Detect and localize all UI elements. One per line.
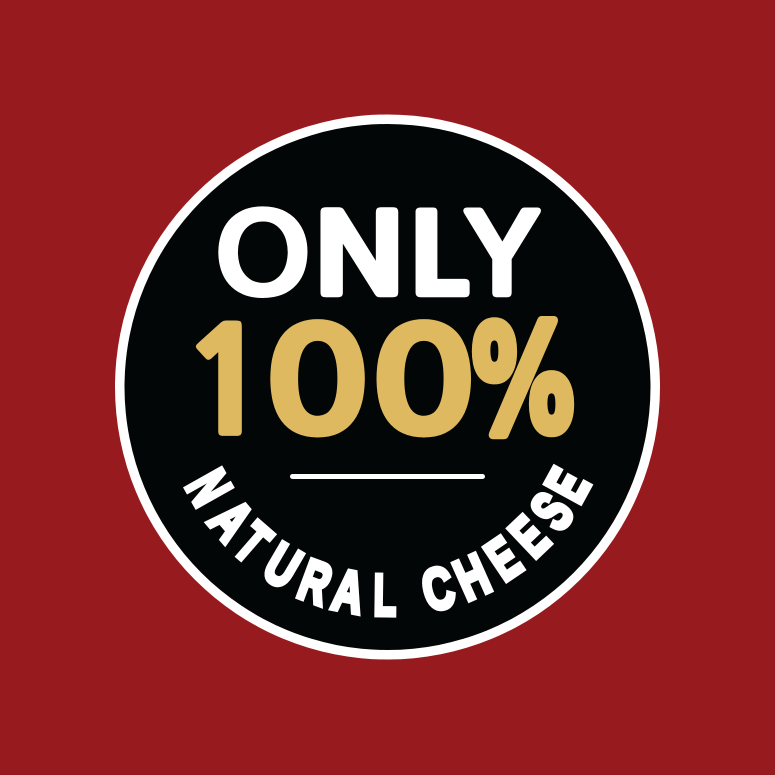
curved label: NATURAL CHEESE: E bbox=[534, 459, 603, 512]
curved label: NATURAL CHEESE: A bbox=[328, 556, 369, 626]
circular badge bbox=[115, 114, 660, 660]
curved label: NATURAL CHEESE: U bbox=[254, 530, 312, 601]
curved label: NATURAL CHEESE: E bbox=[499, 505, 561, 569]
curved label: NATURAL CHEESE: S bbox=[518, 481, 586, 542]
heading: ONLY bbox=[212, 200, 540, 312]
curved label: NATURAL CHEESE: E bbox=[475, 526, 532, 593]
heading: 100%: 0 bbox=[368, 311, 475, 456]
curved label: NATURAL CHEESE: A bbox=[197, 487, 266, 553]
divider line bbox=[290, 474, 485, 479]
curved label: NATURAL CHEESE: C bbox=[416, 553, 461, 624]
curved label: NATURAL CHEESE: N bbox=[173, 460, 242, 516]
heading: 100% bbox=[182, 310, 582, 456]
heading: ONLY: Y bbox=[465, 200, 540, 311]
curved label: NATURAL CHEESE: L bbox=[373, 563, 397, 628]
heading: ONLY: O bbox=[212, 200, 314, 312]
heading: ONLY: L bbox=[408, 200, 468, 311]
heading: ONLY: N bbox=[313, 201, 405, 312]
curved label: NATURAL CHEESE: R bbox=[291, 547, 340, 618]
curved label: NATURAL CHEESE bbox=[173, 459, 603, 628]
curved label: NATURAL CHEESE: H bbox=[445, 541, 499, 613]
curved label: NATURAL CHEESE: T bbox=[222, 512, 282, 575]
heading: 100%: % bbox=[462, 310, 582, 455]
heading: 100%: 0 bbox=[262, 311, 369, 456]
heading: 100%: 1 bbox=[182, 311, 272, 456]
